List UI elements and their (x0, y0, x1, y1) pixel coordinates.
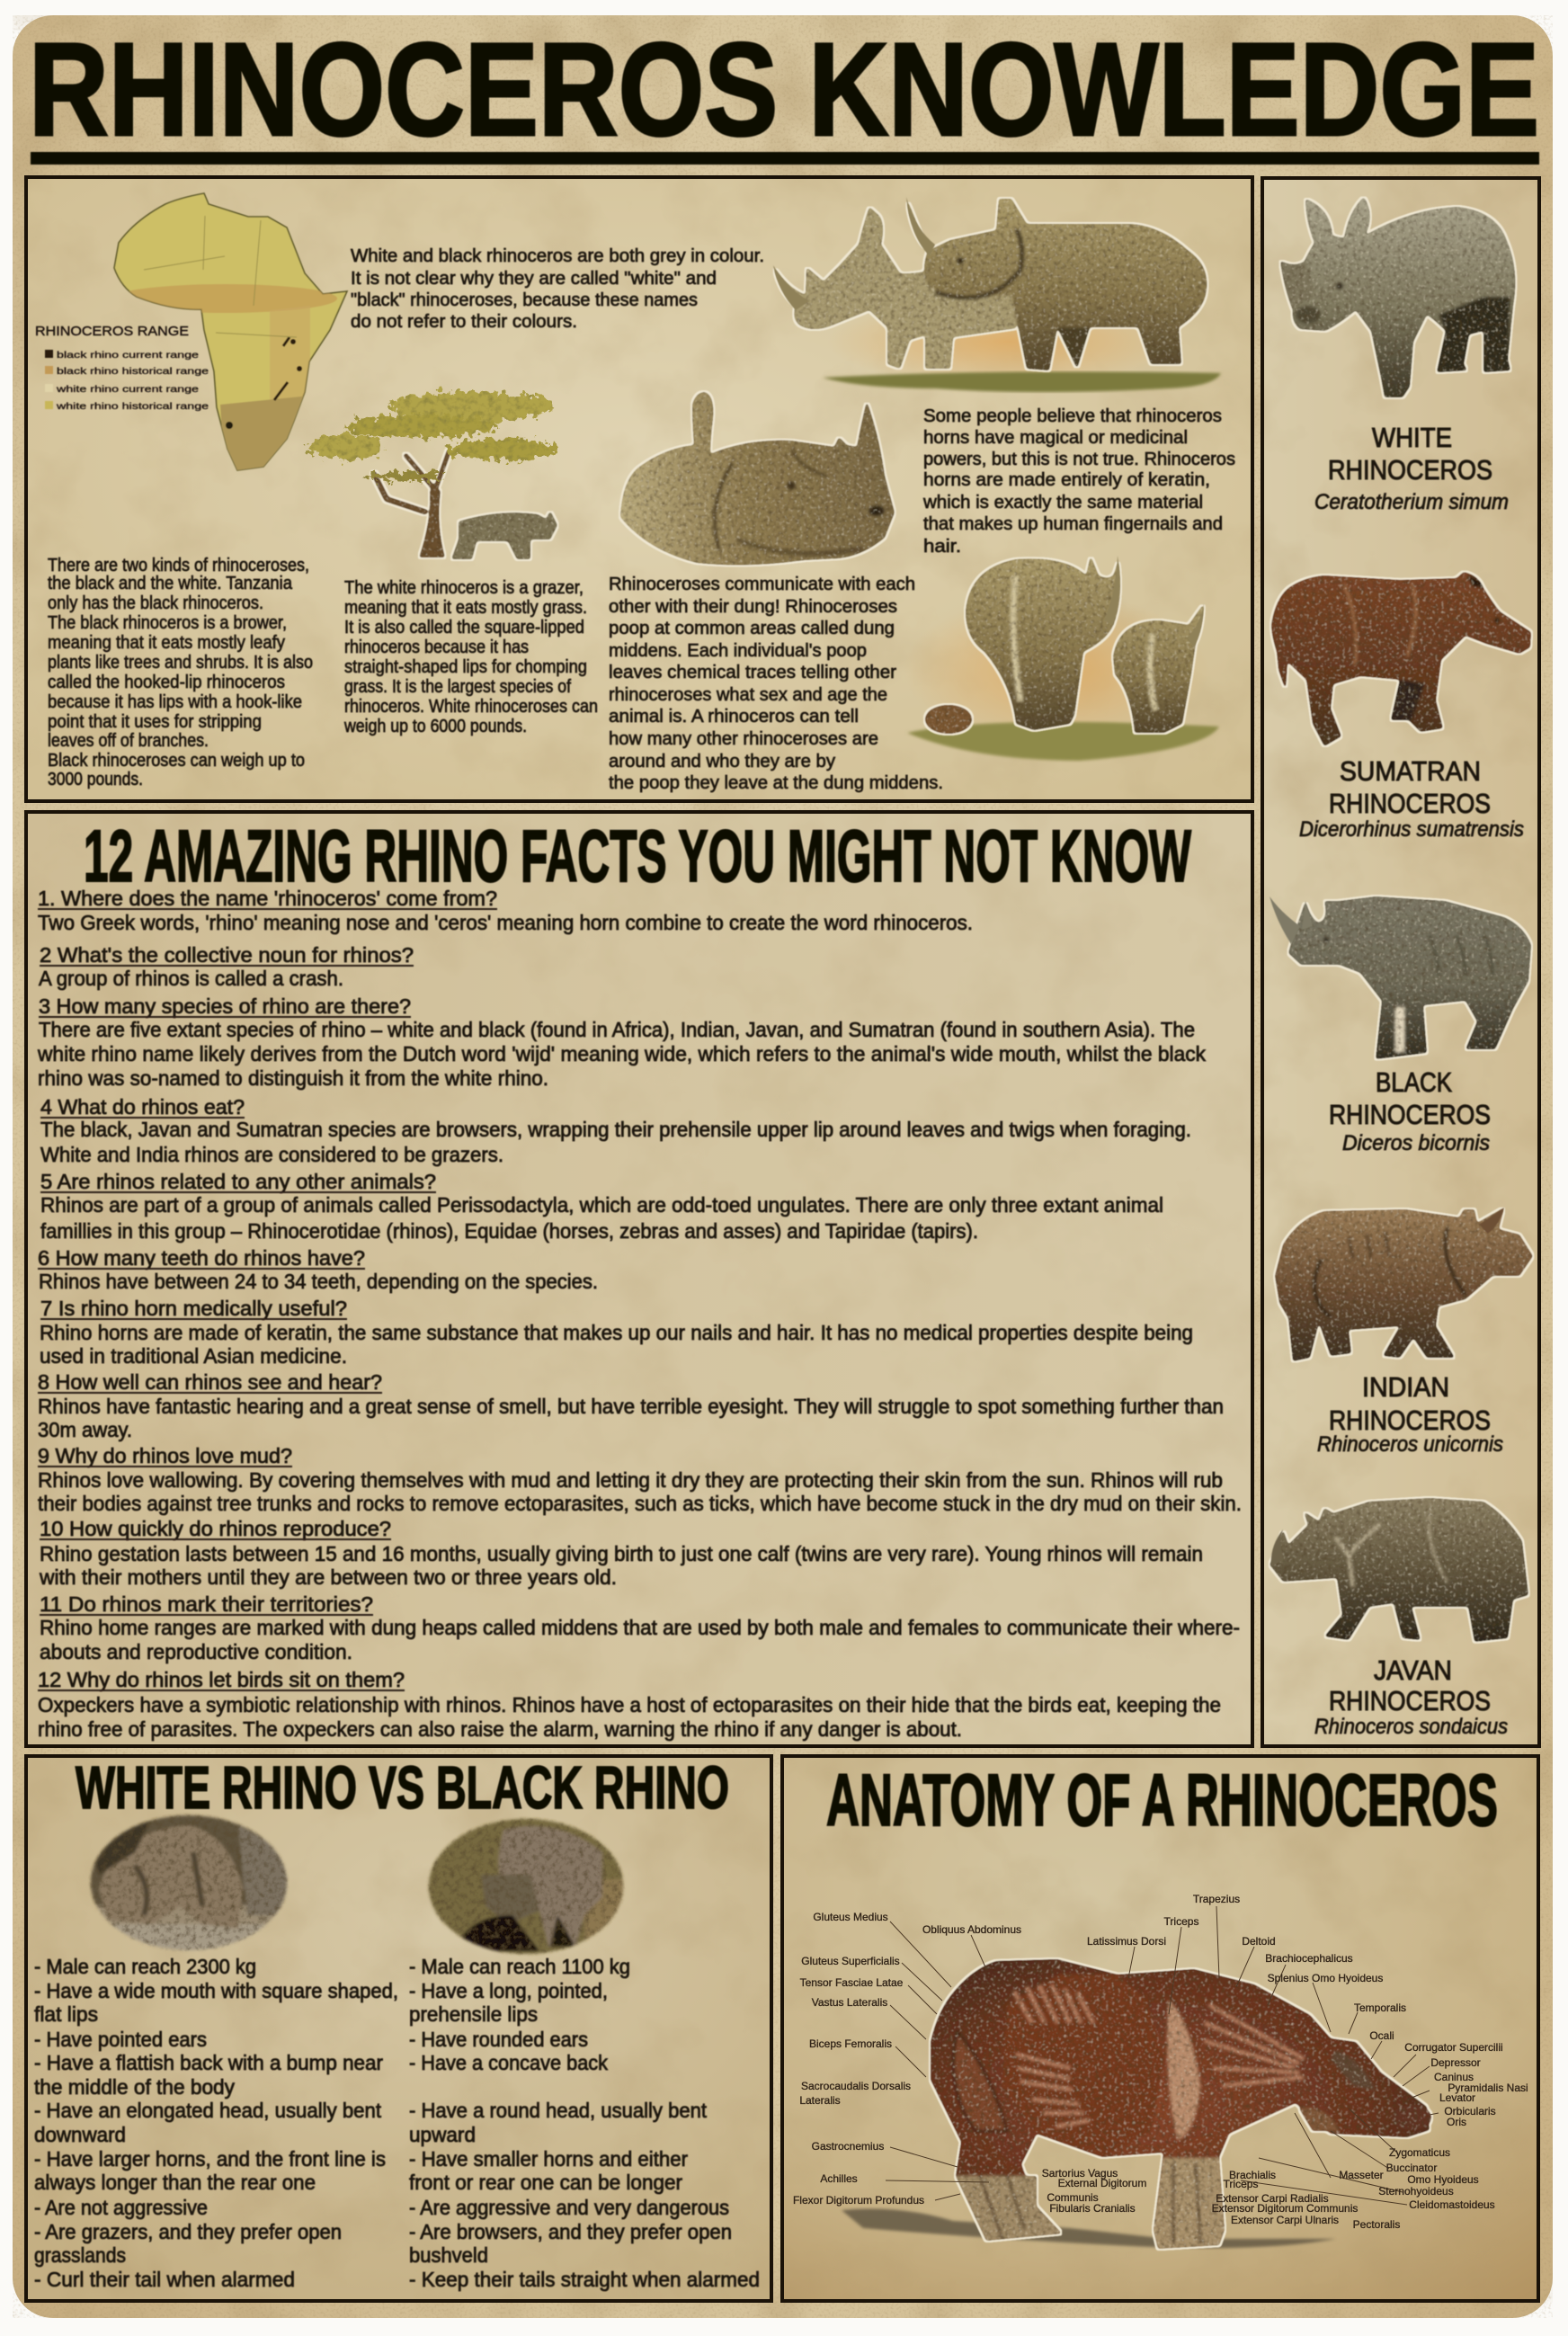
comparison: black rhino traits: - Male can reach 1100 kg (409, 1955, 630, 1978)
text: white rhinoceros: weigh up to 6000 pounds. (343, 717, 527, 736)
comparison: black rhino traits: - Have a round head, usually bent (409, 2099, 708, 2122)
comparison: white rhino traits: - Have pointed ears (34, 2028, 207, 2051)
text: horn myth: which is exactly the same material (922, 493, 1203, 513)
anatomy labels: Levator (1439, 2091, 1475, 2104)
species: indian rhinoceros (1275, 1208, 1533, 1457)
text: dung communication: the poop they leave at the dung middens. (609, 773, 943, 793)
anatomy labels: Omo Hyoideus (1407, 2173, 1479, 2186)
text: grey colour note: White and black rhinoceros are both grey in colour. (351, 246, 764, 266)
anatomy labels: Flexor Digitorum Profundus (793, 2194, 924, 2207)
comparison: black rhino traits: - Have a long, pointed, (409, 1979, 608, 2002)
anatomy labels: Corrugator Supercilii (1404, 2041, 1503, 2054)
comparison: black rhino traits: - Keep their tails straight when alarmed (409, 2268, 760, 2291)
facts list: Rhino home ranges are marked with dung heaps called middens that are used by both male and females to communicate their where- (40, 1616, 1240, 1639)
label: Ceratotherium simum (1314, 490, 1509, 514)
panel: anatomy of a rhinoceros (782, 1756, 1538, 2301)
facts list: 5 Are rhinos related to any other animals? (40, 1170, 436, 1193)
map of Africa with rhinoceros range (112, 193, 347, 477)
anatomy leader lines (886, 1906, 1439, 2205)
photo: black rhino (429, 1819, 629, 1954)
text: horn myth: powers, but this is not true. Rhinoceros (923, 450, 1235, 469)
anatomy labels: Orbicularis (1444, 2105, 1496, 2118)
anatomy labels: Achilles (820, 2172, 858, 2185)
label (1317, 1371, 1503, 1457)
label: INDIAN (1362, 1371, 1449, 1403)
map legend: rhinoceros range (35, 324, 209, 412)
label (1329, 1066, 1491, 1155)
facts list: famillies in this group – Rhinocerotidae (rhinos), Equidae (horses, zebras and asses) and Tapiridae (tapirs). (40, 1219, 978, 1243)
text: black rhinoceros: plants like trees and shrubs. It is also (48, 653, 313, 673)
anatomy labels: Buccinator (1386, 2162, 1437, 2174)
facts list: Rhino horns are made of keratin, the same substance that makes up our nails and hair. It has no medical properties despite being (40, 1321, 1193, 1344)
text: horn myth: Some people believe that rhinoceros (923, 406, 1222, 426)
comparison: black rhino traits: - Are browsers, and they prefer open (409, 2220, 732, 2243)
illustration: two rhinoceroses (773, 197, 1221, 392)
comparison: white rhino traits: grasslands (34, 2243, 126, 2267)
text: black rhinoceros: There are two kinds of rhinoceroses, (48, 556, 309, 575)
facts list: their bodies against tree trunks and rocks to remove ectoparasites, such as ticks, which have become stuck in the dry mud on their skin. (38, 1492, 1242, 1515)
anatomy labels: Extensor Carpi Radialis (1216, 2192, 1329, 2205)
anatomy labels: Depressor (1430, 2056, 1481, 2069)
comparison: white rhino traits: - Have a wide mouth with square shaped, (34, 1979, 398, 2002)
comparison: white rhino traits: - Curl their tail when alarmed (34, 2268, 295, 2291)
facts list: 12 Why do rhinos let birds sit on them? (38, 1668, 405, 1691)
anatomy labels: External Digitorum (1058, 2177, 1146, 2189)
comparison: white rhino traits: - Have a flattish back with a bump near (34, 2051, 383, 2074)
comparison: black rhino traits: prehensile lips (409, 2002, 538, 2026)
map legend: rhinoceros range: RHINOCEROS RANGE (35, 324, 189, 339)
comparison: black rhino traits (409, 1955, 760, 2291)
facts list: 30m away. (38, 1418, 132, 1441)
anatomy labels: Temporalis (1354, 2002, 1406, 2014)
anatomy labels: Masseter (1339, 2169, 1384, 2181)
label: Dicerorhinus sumatrensis (1299, 817, 1524, 842)
text: dung communication: rhinoceroses what sex and age the (609, 685, 887, 705)
text: horn myth: hair. (923, 537, 961, 557)
facts list: white rhino name likely derives from the Dutch word 'wijd' meaning wide, which refers to the animal's wide mouth, whilst the black (37, 1042, 1206, 1065)
anatomy labels: Extensor Carpi Ulnaris (1231, 2214, 1339, 2226)
text: white rhinoceros: straight-shaped lips for chomping (344, 657, 587, 677)
text: black rhinoceros: called the hooked-lip rhinoceros (48, 673, 285, 692)
facts list: 10 How quickly do rhinos reproduce? (40, 1517, 391, 1540)
facts list: abouts and reproductive condition. (40, 1640, 352, 1663)
label: RHINOCEROS (1329, 788, 1491, 819)
text: white rhinoceros: meaning that it eats mostly grass. (344, 598, 587, 618)
label: SUMATRAN (1340, 755, 1481, 787)
species: sumatran rhinoceros (1271, 572, 1531, 842)
anatomy labels: Biceps Femoralis (809, 2037, 892, 2050)
anatomy labels: Obliquus Abdominus (922, 1923, 1021, 1936)
facts list: A group of rhinos is called a crash. (39, 967, 343, 990)
text: black rhinoceros: leaves off of branches. (48, 731, 209, 751)
illustration: rhinos at dung midden (904, 556, 1219, 761)
label: Rhinoceros unicornis (1317, 1432, 1503, 1457)
anatomy labels: Pyramidalis Nasi (1448, 2082, 1528, 2094)
label (1299, 755, 1524, 842)
anatomy labels: Caninus (1434, 2071, 1474, 2083)
comparison: white rhino traits: downward (34, 2123, 126, 2146)
facts list: 6 How many teeth do rhinos have? (38, 1246, 365, 1270)
anatomy labels: Trapezius (1193, 1893, 1240, 1905)
anatomy labels: Triceps (1164, 1915, 1198, 1928)
map legend: rhinoceros range: white rhino historical range (56, 402, 209, 412)
facts list: with their mothers until they are between two or three years old. (39, 1565, 617, 1589)
facts list: There are five extant species of rhino – white and black (found in Africa), Indian, Javan, and Sumatran (found in southern Asia). The (39, 1018, 1195, 1041)
text: black rhinoceros: Black rhinoceroses can weigh up to (48, 751, 305, 771)
text: white rhinoceros: rhinoceros. White rhinoceroses can (344, 697, 598, 717)
text: black rhinoceros: because it has lips with a hook-like (48, 692, 302, 712)
text: horn myth (922, 406, 1235, 557)
anatomy labels: Gluteus Superficialis (801, 1955, 900, 1967)
map legend: rhinoceros range: black rhino historical range (57, 367, 209, 377)
label (1314, 1654, 1508, 1739)
comparison: black rhino traits: bushveld (409, 2243, 488, 2267)
comparison: white rhino traits: always longer than the rear one (34, 2171, 316, 2194)
illustration: acacia tree and rhino (308, 391, 557, 559)
heading: white rhino vs black rhino: WHITE RHINO VS BLACK RHINO (76, 1754, 729, 1822)
text: dung communication: around and who they are by (609, 752, 835, 771)
anatomy labels: Fibularis Cranialis (1049, 2202, 1136, 2215)
facts list: Rhino gestation lasts between 15 and 16 months, usually giving birth to just one calf (twins are very rare). Young rhinos will remain (40, 1542, 1203, 1565)
comparison: white rhino traits: - Male can reach 2300 kg (34, 1955, 256, 1978)
species: javan rhinoceros (1270, 1498, 1528, 1739)
photo: white rhino (90, 1815, 288, 1960)
anatomy labels: Triceps (1224, 2178, 1258, 2190)
anatomy labels: Vastus Lateralis (812, 1996, 887, 2009)
text: white rhinoceros: rhinoceros because it has (344, 637, 529, 657)
facts list: White and India rhinos are considered to be grazers. (40, 1143, 503, 1166)
anatomy labels: Gluteus Medius (813, 1911, 888, 1923)
facts list: The black, Javan and Sumatran species are browsers, wrapping their prehensile upper lip around leaves and twigs when foraging. (40, 1118, 1191, 1141)
comparison: black rhino traits: upward (409, 2123, 476, 2146)
text: dung communication: middens. Each individual's poop (609, 641, 867, 661)
facts list: Two Greek words, 'rhino' meaning nose and 'ceros' meaning horn combine to create the word rhinoceros. (38, 911, 973, 934)
label: Diceros bicornis (1342, 1131, 1490, 1155)
label: RHINOCEROS (1328, 454, 1492, 486)
anatomy labels: Cleidomastoideus (1409, 2198, 1495, 2211)
text: white rhinoceros (343, 578, 598, 736)
comparison: white rhino traits: - Have an elongated head, usually bent (34, 2099, 382, 2122)
anatomy labels: Zygomaticus (1389, 2146, 1450, 2159)
anatomy labels (793, 1893, 1528, 2231)
anatomy labels: Brachiocephalicus (1265, 1952, 1353, 1965)
panel: rhinoceros species (1262, 178, 1539, 1746)
comparison: white rhino traits: flat lips (34, 2002, 98, 2026)
facts list: 1. Where does the name 'rhinoceros' come from? (38, 887, 497, 910)
anatomy labels: Sartorius Vagus (1042, 2167, 1118, 2180)
anatomy labels: Sacrocaudalis Dorsalis (801, 2080, 911, 2092)
facts list: Rhinos have fantastic hearing and a great sense of smell, but have terrible eyesight. They will struggle to spot something further than (38, 1395, 1224, 1418)
text: horn myth: horns have magical or medicinal (923, 428, 1188, 448)
muscular rhinoceros figure (931, 1959, 1431, 2249)
facts list: used in traditional Asian medicine. (40, 1344, 347, 1368)
facts list: 7 Is rhino horn medically useful? (40, 1297, 347, 1320)
label: RHINOCEROS (1329, 1685, 1491, 1716)
anatomy labels: Tensor Fasciae Latae (800, 1976, 904, 1989)
label: Rhinoceros sondaicus (1314, 1715, 1508, 1739)
text: black rhinoceros (48, 556, 313, 789)
anatomy labels: Pectoralis (1353, 2218, 1400, 2231)
facts list: rhino was so-named to distinguish it from the white rhino. (38, 1066, 548, 1090)
facts list: 4 What do rhinos eat? (40, 1095, 245, 1119)
comparison: black rhino traits: - Have smaller horns and either (409, 2147, 688, 2171)
anatomy labels: Splenius Omo Hyoideus (1268, 1972, 1383, 1984)
comparison: black rhino traits: - Have a concave back (409, 2051, 608, 2074)
text: black rhinoceros: The black rhinoceros is a brower, (48, 613, 287, 633)
text: horn myth: horns are made entirely of keratin, (923, 470, 1210, 490)
text: white rhinoceros: It is also called the square-lipped (344, 618, 584, 637)
anatomy labels: Latissimus Dorsi (1087, 1935, 1166, 1948)
label: JAVAN (1374, 1654, 1452, 1686)
comparison: white rhino traits: - Are not aggressive (34, 2196, 208, 2219)
anatomy labels: Ocali (1369, 2029, 1394, 2042)
text: black rhinoceros: the black and the white. Tanzania (48, 574, 293, 593)
text: grey colour note: It is not clear why they are called "white" and (351, 269, 717, 289)
facts list: Rhinos have between 24 to 34 teeth, depending on the species. (39, 1270, 598, 1293)
label (1314, 422, 1509, 514)
anatomy labels: Sternohyoideus (1378, 2185, 1454, 2198)
text: grey colour note: do not refer to their colours. (351, 312, 577, 332)
panel: white rhino vs black rhino (26, 1754, 771, 2301)
text: dung communication: animal is. A rhinoceros can tell (609, 707, 859, 727)
text: dung communication: poop at common areas called dung (609, 619, 895, 638)
text: dung communication: Rhinoceroses communicate with each (609, 575, 915, 594)
species: white rhinoceros (1280, 197, 1515, 514)
facts list: 9 Why do rhinos love mud? (38, 1444, 292, 1467)
text: black rhinoceros: 3000 pounds. (48, 770, 143, 789)
text: dung communication (609, 575, 943, 793)
text: black rhinoceros: point that it uses for stripping (48, 712, 262, 732)
comparison: white rhino traits: the middle of the body (34, 2075, 235, 2099)
anatomy labels: Lateralis (799, 2094, 841, 2107)
facts list: Oxpeckers have a symbiotic relationship with rhinos. Rhinos have a host of ectoparasites on their hide that the birds eat, keeping the (38, 1693, 1221, 1716)
map legend: rhinoceros range: black rhino current range (57, 351, 200, 361)
comparison: black rhino traits: front or rear one can be longer (409, 2171, 682, 2194)
species: black rhinoceros (1270, 896, 1531, 1155)
text: horn myth: that makes up human fingernails and (923, 514, 1223, 534)
label: WHITE (1372, 422, 1452, 453)
ground shadow (842, 2208, 1336, 2248)
anatomy labels: Communis (1047, 2191, 1099, 2204)
text: grey colour note: "black" rhinoceroses, because these names (351, 290, 698, 310)
comparison: white rhino traits (34, 1955, 398, 2291)
text: dung communication: other with their dung! Rhinoceroses (609, 597, 897, 617)
label: RHINOCEROS (1329, 1099, 1491, 1130)
facts list: 8 How well can rhinos see and hear? (38, 1370, 382, 1394)
text: dung communication: leaves chemical traces telling other (609, 663, 896, 682)
comparison: white rhino traits: - Have larger horns, and the front line is (34, 2147, 386, 2171)
panel: rhinoceros overview (26, 177, 1252, 801)
comparison: white rhino traits: - Are grazers, and they prefer open (34, 2220, 342, 2243)
label: BLACK (1376, 1066, 1452, 1098)
panel: twelve amazing rhino facts (26, 812, 1252, 1746)
facts list: rhino free of parasites. The oxpeckers can also raise the alarm, warning the rhino if any danger is about. (38, 1717, 962, 1741)
illustration: rhino head (620, 392, 895, 565)
text: grey colour note (351, 246, 764, 332)
facts list (37, 887, 1242, 1741)
facts list: Rhinos love wallowing. By covering themselves with mud and letting it dry they are protecting their skin from the sun. Rhinos will rub (38, 1468, 1223, 1492)
comparison: black rhino traits: - Have rounded ears (409, 2028, 588, 2051)
text: white rhinoceros: The white rhinoceros is a grazer, (344, 578, 584, 598)
map legend: rhinoceros range: white rhino current range (56, 385, 200, 395)
anatomy labels: Extensor Digitorum Communis (1212, 2202, 1358, 2215)
anatomy labels: Oris (1447, 2116, 1466, 2128)
anatomy labels: Gastrocnemius (812, 2140, 884, 2153)
comparison: black rhino traits: - Are aggressive and very dangerous (409, 2196, 729, 2219)
text: black rhinoceros: only has the black rhinoceros. (48, 593, 263, 613)
text: dung communication: how many other rhinoceroses are (609, 729, 878, 749)
text: white rhinoceros: grass. It is the largest species of (344, 677, 571, 697)
facts list: 11 Do rhinos mark their territories? (40, 1592, 373, 1616)
text: black rhinoceros: meaning that it eats mostly leafy (48, 633, 285, 653)
anatomy labels: Deltoid (1242, 1935, 1276, 1948)
facts list: 2 What's the collective noun for rhinos? (40, 943, 414, 967)
facts list: 3 How many species of rhino are there? (39, 994, 411, 1018)
facts list: Rhinos are part of a group of animals called Perissodactyla, which are odd-toed ungulates. There are only three extant animal (40, 1193, 1163, 1217)
anatomy labels: Brachialis (1229, 2169, 1276, 2181)
label: RHINOCEROS (1329, 1404, 1491, 1436)
